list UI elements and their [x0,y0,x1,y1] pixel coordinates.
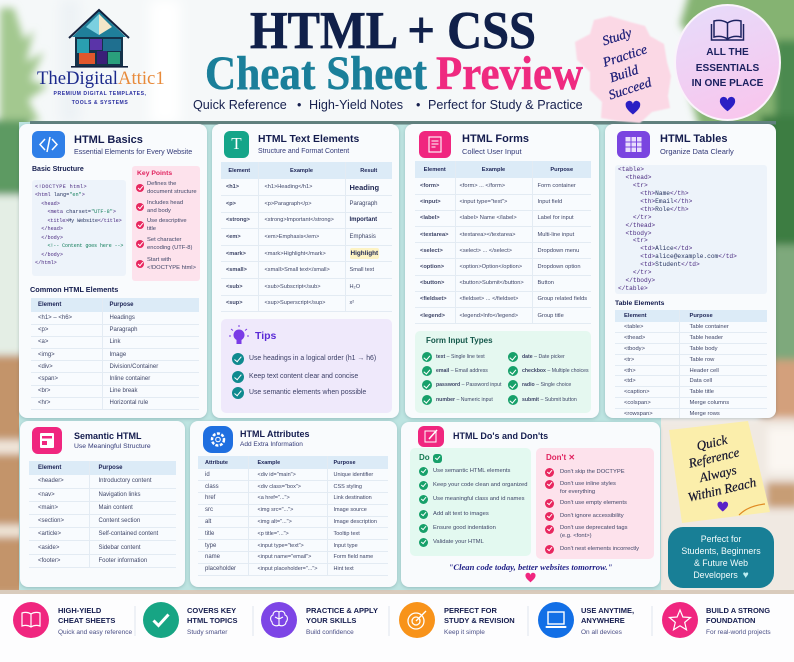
list: don't [536,448,654,559]
input types list: password – Password input [436,382,501,388]
title: Cheat Sheet Preview [205,50,583,98]
icon: table grid [617,131,650,158]
item: anywhere [538,602,634,638]
table: attributes: name [205,554,220,560]
text: For real-world projects [706,629,771,636]
subtitle strip: Perfect for Study & Practice [428,98,583,112]
panel: HTML Basics [19,124,207,418]
heading: table elements: Table Elements [615,300,664,307]
badge: study practice build succeed: Succeed [607,74,653,102]
table: forms: <option> [420,264,444,270]
heading: Semantic HTML [74,431,142,441]
footer benefits strip [13,602,771,638]
input types list: number – Numeric input [436,397,493,403]
table: text elements: <sub> [226,284,242,290]
callout: audience badge: Students, Beginners [681,546,761,556]
table: forms: <button> [420,280,444,286]
sticky note: Quick [695,432,729,453]
table: text elements: <strong>Important</strong> [264,217,334,223]
table: semantic: Purpose [98,465,123,471]
logo: The Digital Attic [37,8,165,106]
table: text elements: Result [360,168,377,174]
heading: HTML Basics [74,134,143,146]
text: STUDY & REVISION [444,616,515,625]
text [58,606,132,636]
table: forms: <input type="text"> [460,199,507,205]
don't items: Don't ignore accessibility [560,513,624,519]
callout: audience badge [668,527,774,588]
table: attributes: title [205,531,214,537]
callout: audience badge: Perfect for [701,534,741,544]
table: semantic: <article> [38,531,61,537]
table: attributes [198,456,388,576]
table: table elements: Table header [690,335,723,341]
table: common elements: <br> [38,388,50,394]
input types heading: Form Input Types [426,336,493,345]
icon: form document [419,131,451,158]
tips list: Use headings in a logical order (h1 → h6) [249,355,376,362]
table: table elements: <tr> [624,357,634,363]
subtitle strip: Quick Reference [193,98,287,112]
table: forms: Dropdown option [538,264,581,270]
key points heading: Key Points [137,170,172,177]
table: attributes: Image description [334,519,377,525]
table: table elements: Table body [690,346,718,352]
table: forms: <input> [420,199,441,205]
panel: HTML Tables [605,124,776,418]
table: table elements: Element [624,313,647,319]
panel: HTML Forms [405,124,599,418]
table: table elements [615,310,767,420]
table: text elements: x² [350,300,354,306]
table: table elements: Merge rows [690,411,720,417]
badge text: IN ONE PLACE [692,78,763,89]
table: common elements [31,298,199,410]
subheading: Use Meaningful Structure [74,443,151,450]
table: semantic: <header> [38,478,64,484]
table: common elements: <h1> – <h6> [38,315,72,321]
table: semantic: <section> [38,518,64,524]
subtitle strip: High-Yield Notes [309,98,403,112]
list: do [410,448,531,556]
item: revision [399,602,515,638]
subtitle strip: • [416,98,420,112]
don't items [545,468,639,554]
table: text elements: <mark> [226,251,246,257]
table: attributes: <a href="..."> [258,495,290,501]
key points list: Start with <!DOCTYPE html> [147,257,196,271]
icon: laptop [538,602,574,638]
table: semantic: <nav> [38,492,55,498]
badge: study practice build succeed [574,16,672,124]
table: common elements: Horizontal rule [110,400,148,406]
table: common elements: Inline container [110,376,150,382]
table: table elements: <rowspan> [624,411,653,417]
table: forms [415,161,591,324]
heading: HTML Text Elements [258,134,359,145]
table: text elements: <strong> [226,217,250,223]
icon: edit square [418,426,444,447]
table: attributes: <div class="box"> [258,484,301,490]
table: text elements: Small text [350,267,374,273]
icon: open book [710,20,744,41]
table: table elements: <caption> [624,389,649,395]
icon: letter T [224,131,249,158]
text: BUILD A STRONG [706,606,770,615]
input types list: date – Date picker [522,354,565,360]
table: attributes: Image source [334,507,367,513]
table: forms: <textarea> [420,232,448,238]
table: text elements: H₂O [350,284,360,290]
table: semantic: <footer> [38,558,60,564]
panel: HTML Text Elements [212,124,399,418]
item: key topics [143,602,238,638]
table: text elements: <h1> [226,184,239,190]
text: FOUNDATION [706,616,755,625]
table: text elements: Paragraph [350,201,378,207]
table: text elements: <h1>Heading</h1> [264,184,312,190]
table: common elements: <a> [38,339,48,345]
table: common elements: Division/Container [110,364,158,370]
table: table elements: <table> [624,324,643,330]
table: forms: <legend>Info</legend> [460,313,518,319]
icon: letter T: T [231,134,242,153]
table: common elements: <img> [38,352,55,358]
sticky note [669,421,770,523]
table: text elements: <p>Paragraph</p> [264,201,311,207]
table: common elements: Image [110,352,126,358]
table: text elements: Example [290,168,313,174]
table: forms: Label for input [538,215,574,221]
table: attributes: href [205,495,215,501]
icon: book [13,602,49,638]
item: high-yield [13,602,132,638]
table: attributes: Hint text [334,566,354,572]
table: text elements: <em> [226,234,241,240]
text: PRACTICE & APPLY [306,606,378,615]
table: text elements: <small> [226,267,247,273]
table: attributes: <p title="..."> [258,531,289,537]
table: attributes: Attribute [205,460,228,466]
panel: Semantic HTML [20,421,185,587]
table: common elements: Purpose [110,302,134,308]
key points list: Set character encoding (UTF-8) [147,237,192,251]
badge: all the essentials [674,4,781,121]
table: semantic: Content section [98,518,140,524]
table: common elements: <div> [38,364,53,370]
table: attributes: <img alt="..."> [258,519,292,525]
sticky note: Reference [686,444,741,471]
table: attributes: id [205,472,210,478]
heading: HTML Tables [660,133,727,145]
input types list: radio – Single choice [522,382,571,388]
table: text elements: Important [350,217,377,223]
table: common elements: Link [110,339,121,345]
table: table elements: Merge columns [690,400,729,406]
text: Quick and easy reference [58,629,132,636]
table: attributes: <input placeholder="..."> [258,566,318,572]
text: ANYWHERE [581,616,625,625]
table: forms: Dropdown menu [538,248,579,254]
table: common elements: <span> [38,376,58,382]
don't items: Don't use deprecated tags (e.g. <font>) [560,525,628,539]
do items: Validate your HTML [433,539,484,545]
icon: glass house [68,8,130,68]
tips heading: Tips [255,330,276,342]
table: attributes: Purpose [334,460,356,466]
table: forms: <legend> [420,313,445,319]
callout: audience badge: Developers ♥ [693,570,749,581]
table: forms: Purpose [550,166,573,172]
badge: study practice build succeed: Build [608,62,640,85]
subheading: Organize Data Clearly [660,146,734,156]
callout: tips [221,319,392,413]
table: table elements: Purpose [690,313,713,319]
table: text elements: <sup> [226,300,242,306]
input types list: text – Single line text [436,354,485,360]
don't items: Don't use empty elements [560,500,627,506]
table: forms: <select> [420,248,443,254]
do heading: Do [419,453,430,462]
don't items: Don't skip the DOCTYPE [560,469,625,475]
icon: brain [261,602,297,638]
icon: code brackets [32,131,65,158]
table: forms: Button [538,280,554,286]
badge: study practice build succeed: Practice [600,41,649,70]
text [306,606,378,636]
table: forms: Example [482,166,505,172]
icon: gear [203,426,233,453]
do items: Use meaningful class and id names [433,496,525,502]
table: table elements: Data cell [690,378,712,384]
table: forms: <fieldset> [420,296,447,302]
text: Study smarter [187,629,227,636]
icon: light bulb [229,325,249,344]
panel: HTML Do's and Don'ts [401,422,660,587]
table: semantic: Self-contained content [98,531,158,537]
table: attributes: <input type="text"> [258,543,304,549]
table: attributes: CSS styling [334,484,362,490]
tips list: Keep text content clear and concise [249,373,358,380]
don't items: Don't use inline styles for everything [560,481,616,495]
item: foundation [662,602,771,638]
table: forms: Multi-line input [538,232,574,238]
table: forms: <fieldset> ... </fieldset> [460,296,518,302]
text [581,606,634,636]
table: attributes: Tooltip text [334,531,360,537]
table: attributes: Example [258,460,280,466]
table: attributes: Link destination [334,495,372,501]
table: table elements: <colspan> [624,400,651,406]
text: HIGH-YIELD [58,606,101,615]
icon: target [399,602,435,638]
table: table elements: <td> [624,378,636,384]
table: text elements: Element [228,168,250,174]
table: text elements: Emphasis [350,234,376,240]
text: HTML TOPICS [187,616,238,625]
callout: audience badge: & Future Web [694,558,748,568]
icon: star [662,602,698,638]
text: On all devices [581,629,622,636]
table: semantic: <main> [38,505,58,511]
subtitle strip: • [297,98,301,112]
table: table elements: Header cell [690,368,719,374]
table: text elements: <mark>Highlight</mark> [264,251,326,257]
table: text elements: <em>Emphasis</em> [264,234,319,240]
badge text: ALL THE [706,47,749,58]
input types list: email – Email address [436,368,488,374]
text: Keep it simple [444,629,485,636]
do items: Use semantic HTML elements [433,468,510,474]
table: common elements: <hr> [38,400,50,406]
do items: Add alt text to images [433,511,489,517]
heading: basic structure: Basic Structure [32,166,84,173]
table: attributes: <input name="email"> [258,554,311,560]
table: table elements: Table row [690,357,714,363]
table: forms: <label> [420,215,440,221]
do items [419,467,528,547]
table: text elements: <sup>Superscript</sup> [264,300,325,306]
heading: HTML Do's and Don'ts [453,431,548,441]
panel: HTML Attributes [190,421,397,587]
table: attributes: type [205,543,216,549]
sticky note: Always [697,462,738,485]
table: attributes: Input type [334,543,358,549]
table: text elements: Heading [350,183,379,192]
table: table elements: Table title [690,389,714,395]
table: text elements [221,162,392,312]
code block: basic structure: <!DOCTYPE html> <html lang="en"> <head> <meta charset="UTF-8"> <title>My Website</title> </head> </body> <!-- Content goes here --> </body> </html> [35,184,123,266]
table: forms: <form> [420,183,439,189]
table: common elements: <p> [38,327,48,333]
table: table elements: Table container [690,324,729,330]
badge text [692,47,763,89]
table: forms: Input field [538,199,562,205]
table: attributes: placeholder [205,566,236,572]
text: PERFECT FOR [444,606,497,615]
table: forms: <option>Option</option> [460,264,522,270]
badge text: ESSENTIALS [696,62,759,74]
subtitle strip [193,98,583,112]
table: attributes: <div id="main"> [258,472,296,478]
icon: heart [720,96,736,112]
table: forms: <label> Name </label> [460,215,517,221]
table: forms: Form container [538,183,576,189]
table: attributes: Form field name [334,554,373,560]
table: table elements: <tbody> [624,346,645,352]
text: Build confidence [306,629,354,636]
badge: study practice build succeed: Study [600,25,633,48]
table: semantic: Main content [98,505,133,511]
table: common elements: Paragraph [110,327,138,333]
table: attributes: Unique identifier [334,472,373,478]
text [706,606,771,636]
table: attributes: src [205,507,213,513]
icon: pink heart [525,572,536,582]
table: common elements: Headings [110,315,135,321]
do check icon [433,454,442,463]
table: semantic: Introductory content [98,478,152,484]
key points list: Use descriptive title [147,218,187,232]
callout: key points [132,166,200,281]
don't heading: Don't ✕ [546,453,575,462]
sticky note: Within Reach [686,474,758,505]
callout: form input types [415,331,591,413]
table: text elements: <p> [226,201,236,207]
table: semantic: Sidebar content [98,545,141,551]
table: text elements: <small>Small text</small> [264,267,330,273]
don't items: Don't nest elements incorrectly [560,546,639,552]
logo wordmark: TheDigitalAttic1 [37,68,165,89]
heading: HTML Forms [462,133,529,145]
table: semantic: Navigation links [98,492,141,498]
subheading: Collect User Input [462,147,522,156]
table: forms: Group related fields [538,296,587,302]
table: common elements: Element [38,302,61,308]
table: common elements: Line break [110,388,138,394]
subheading: Structure and Format Content [258,148,349,155]
key points list: Defines the document structure [147,181,197,195]
key points list: Includes head and body [147,200,183,214]
table: table elements: <thead> [624,335,645,341]
heading: HTML Attributes [240,429,310,439]
do items: Ensure good indentation [433,525,496,531]
table: forms: Element [424,166,446,172]
tips list [232,353,376,399]
table: semantic: <aside> [38,545,59,551]
table: semantic: Footer information [98,558,147,564]
tips list: Use semantic elements when possible [249,389,366,396]
text: CHEAT SHEETS [58,616,115,625]
subheading: Add Extra Information [240,441,303,448]
do items: Keep your code clean and organized [433,482,527,488]
table: semantic: Element [38,465,61,471]
icon: check [143,602,179,638]
table: semantic [29,461,176,568]
logo tagline: PREMIUM DIGITAL TEMPLATES, TOOLS & SYSTEMS [54,91,146,106]
input types list [422,352,589,405]
quote: "Clean code today, better websites tomorrow." [449,562,612,572]
text: YOUR SKILLS [306,616,356,625]
text: USE ANYTIME, [581,606,634,615]
table: text elements: <sub>Subscript</sub> [264,284,320,290]
table: attributes: <img src="..."> [258,507,293,513]
input types list: checkbox – Multiple choices [522,368,589,374]
table: forms: <button>Submit</button> [460,280,524,286]
table: forms: <textarea></textarea> [460,232,515,238]
input types list: submit – Submit button [522,397,577,403]
text [187,606,238,636]
table: forms: <select> ... </select> [460,248,512,254]
text: COVERS KEY [187,606,236,615]
item: practice [261,602,378,638]
code block: table markup: <table> <thead> <tr> <th>Name</th> <th>Email</th> <th>Role</th> </tr> </thead> <tbody> <tr> <td>Alice</td> <td>alice@example.com</td> <td>Student</td> </tr> </tbody> </table> [618,166,737,292]
table: forms: <form> ... </form> [460,183,505,189]
key points list [136,181,197,271]
heading: common elements: Common HTML Elements [30,285,118,294]
subheading: Essential Elements for Every Website [74,148,192,156]
table: attributes: alt [205,519,211,525]
table: table elements: <th> [624,368,636,374]
table: forms: Group title [538,313,564,319]
table: attributes: class [205,484,219,490]
table: text elements: Highlight [350,250,378,257]
text [444,606,515,636]
icon: page layout [32,427,62,454]
